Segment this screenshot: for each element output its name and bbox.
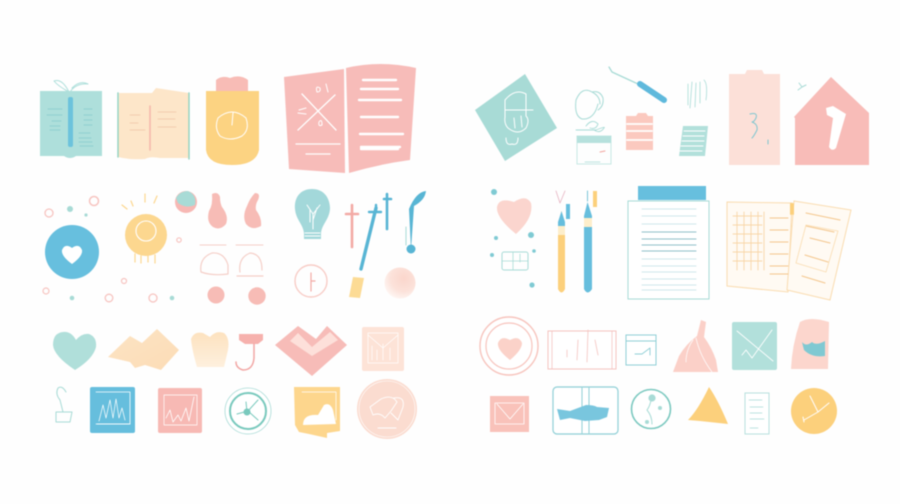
icon: teal calendar with sprig: [576, 121, 611, 164]
icon: blue pen: [584, 191, 597, 292]
icon: yellow clock circle: [791, 388, 837, 434]
icon: pink shape with teal blob: [791, 319, 829, 369]
icon: pink hook: [236, 334, 263, 370]
icon: pink heart with dots: [490, 189, 536, 288]
icon: book with blue ribbon: [553, 387, 618, 434]
icon: seed outline: [576, 90, 603, 119]
icon: teal envelope square: [732, 322, 777, 370]
icon: pink envelope: [490, 396, 529, 432]
icon: cream folded wings: [108, 329, 179, 370]
icon: blue circle with heart: [45, 225, 99, 279]
icon: peach shaded circle: [384, 268, 416, 298]
icon: tool sticks: [346, 194, 391, 269]
icon: yellow cone: [688, 387, 728, 424]
icon: teal and pink ball: [175, 191, 197, 213]
icon: cream open book: [118, 88, 189, 159]
icon: yellow sun: [122, 194, 167, 263]
icon: pink clock outline: [295, 265, 327, 297]
icon: pink drops: [208, 193, 261, 228]
icon: pink dots: [208, 286, 266, 305]
icon: compass clock: [225, 388, 271, 434]
icon: teal note: [679, 126, 708, 156]
icon: pink chevron heart: [275, 326, 347, 376]
icon: teal tilted square with basket: [475, 74, 557, 161]
icon: peach circle badge: [357, 379, 417, 439]
icon: peach square chart: [362, 327, 404, 371]
icon: calendar: [626, 335, 656, 365]
icon: teal flower circle: [632, 390, 670, 428]
icon: heart in ring: [480, 317, 538, 375]
icon: teal document: [745, 393, 769, 434]
decorative dots around heart circle: [43, 196, 181, 302]
icon: blue chart card: [90, 387, 135, 433]
icon: open ledger book: [727, 201, 851, 300]
icon: yellow note with cloud: [294, 387, 340, 438]
icon: large pink open book: [284, 64, 416, 173]
icon: pink house: [794, 77, 869, 165]
icon: yellow pen: [556, 191, 570, 292]
icon: pink chart card: [158, 388, 202, 433]
icon: teal hook tag: [56, 387, 72, 422]
icon: cloud outlines: [200, 245, 263, 276]
icon: light pink battery: [729, 70, 780, 165]
icon: blue screwdriver: [609, 67, 664, 100]
icon: striped panel: [548, 330, 616, 369]
icon: document with blue header: [628, 186, 709, 299]
icon: sketch lines: [688, 80, 707, 108]
icon: yellow block: [349, 277, 364, 298]
icon: teal sketch chart: [502, 252, 528, 270]
icon: teal heart: [53, 332, 96, 370]
icon: blue music note: [406, 191, 426, 254]
icon: pink clipboard: [626, 113, 653, 150]
icon: teal book: [40, 80, 102, 158]
icon: yellow jar: [206, 76, 259, 165]
icon: pink pouch: [673, 320, 718, 372]
icon: cream shield: [191, 332, 228, 367]
icon: teal lightbulb: [295, 189, 330, 239]
